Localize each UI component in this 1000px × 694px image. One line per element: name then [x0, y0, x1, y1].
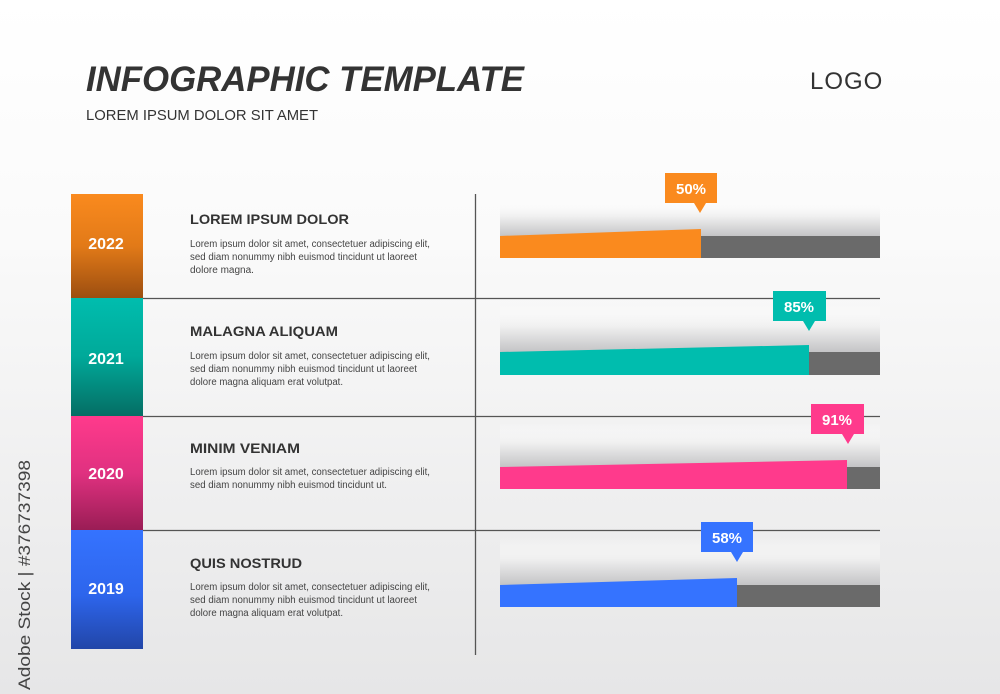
body text: dolore magna.	[190, 265, 254, 276]
row: 2019	[71, 522, 880, 649]
body text: dolore magna aliquam erat volutpat.	[190, 608, 343, 619]
body text: Lorem ipsum dolor sit amet, consectetuer adipiscing elit,	[190, 351, 430, 362]
year block 2022	[71, 194, 143, 298]
callout 58%: 58%	[712, 530, 742, 547]
body text: Lorem ipsum dolor sit amet, consectetuer adipiscing elit,	[190, 239, 430, 250]
body text	[190, 351, 430, 388]
subtitle: LOREM IPSUM DOLOR SIT AMET	[86, 107, 318, 124]
body text: Lorem ipsum dolor sit amet, consectetuer adipiscing elit,	[190, 467, 430, 478]
year block 2020	[71, 416, 143, 530]
side watermark text: Adobe Stock | #376737398	[15, 460, 34, 690]
body text: sed diam nonummy nibh euismod tincidunt ut laoreet	[190, 364, 417, 375]
heading: MINIM VENIAM	[190, 440, 300, 456]
body text: sed diam nonummy nibh euismod tincidunt ut.	[190, 480, 387, 491]
callout 85%: 85%	[784, 299, 814, 316]
bar 50%	[500, 200, 880, 258]
callout 91%	[811, 404, 864, 444]
body text: Lorem ipsum dolor sit amet, consectetuer adipiscing elit,	[190, 582, 430, 593]
callout 85%	[773, 291, 826, 331]
row: 2020	[71, 404, 880, 530]
callout 58%	[701, 522, 753, 562]
bar 58%	[500, 537, 880, 607]
row: 2021	[71, 291, 880, 416]
year block 2022: 2022	[88, 236, 124, 253]
row: 2022	[71, 173, 880, 298]
body text	[190, 582, 430, 619]
heading: MALAGNA ALIQUAM	[190, 323, 338, 339]
heading: LOREM IPSUM DOLOR	[190, 211, 349, 227]
year block 2020: 2020	[88, 466, 124, 483]
heading: QUIS NOSTRUD	[190, 555, 302, 571]
body text	[190, 467, 430, 491]
bar 91%	[500, 423, 880, 489]
year block 2019: 2019	[88, 581, 124, 598]
grid lines	[143, 194, 880, 655]
year block 2019	[71, 530, 143, 649]
title: INFOGRAPHIC TEMPLATE	[86, 60, 526, 99]
callout 50%: 50%	[676, 181, 706, 198]
year block 2021	[71, 298, 143, 416]
callout 91%: 91%	[822, 412, 852, 429]
bar 85%	[500, 305, 880, 375]
logo: LOGO	[810, 68, 883, 95]
body text: sed diam nonummy nibh euismod tincidunt ut laoreet	[190, 252, 417, 263]
body text: sed diam nonummy nibh euismod tincidunt ut laoreet	[190, 595, 417, 606]
body text	[190, 239, 430, 276]
body text: dolore magna aliquam erat volutpat.	[190, 377, 343, 388]
year block 2021: 2021	[88, 351, 124, 368]
callout 50%	[665, 173, 717, 213]
